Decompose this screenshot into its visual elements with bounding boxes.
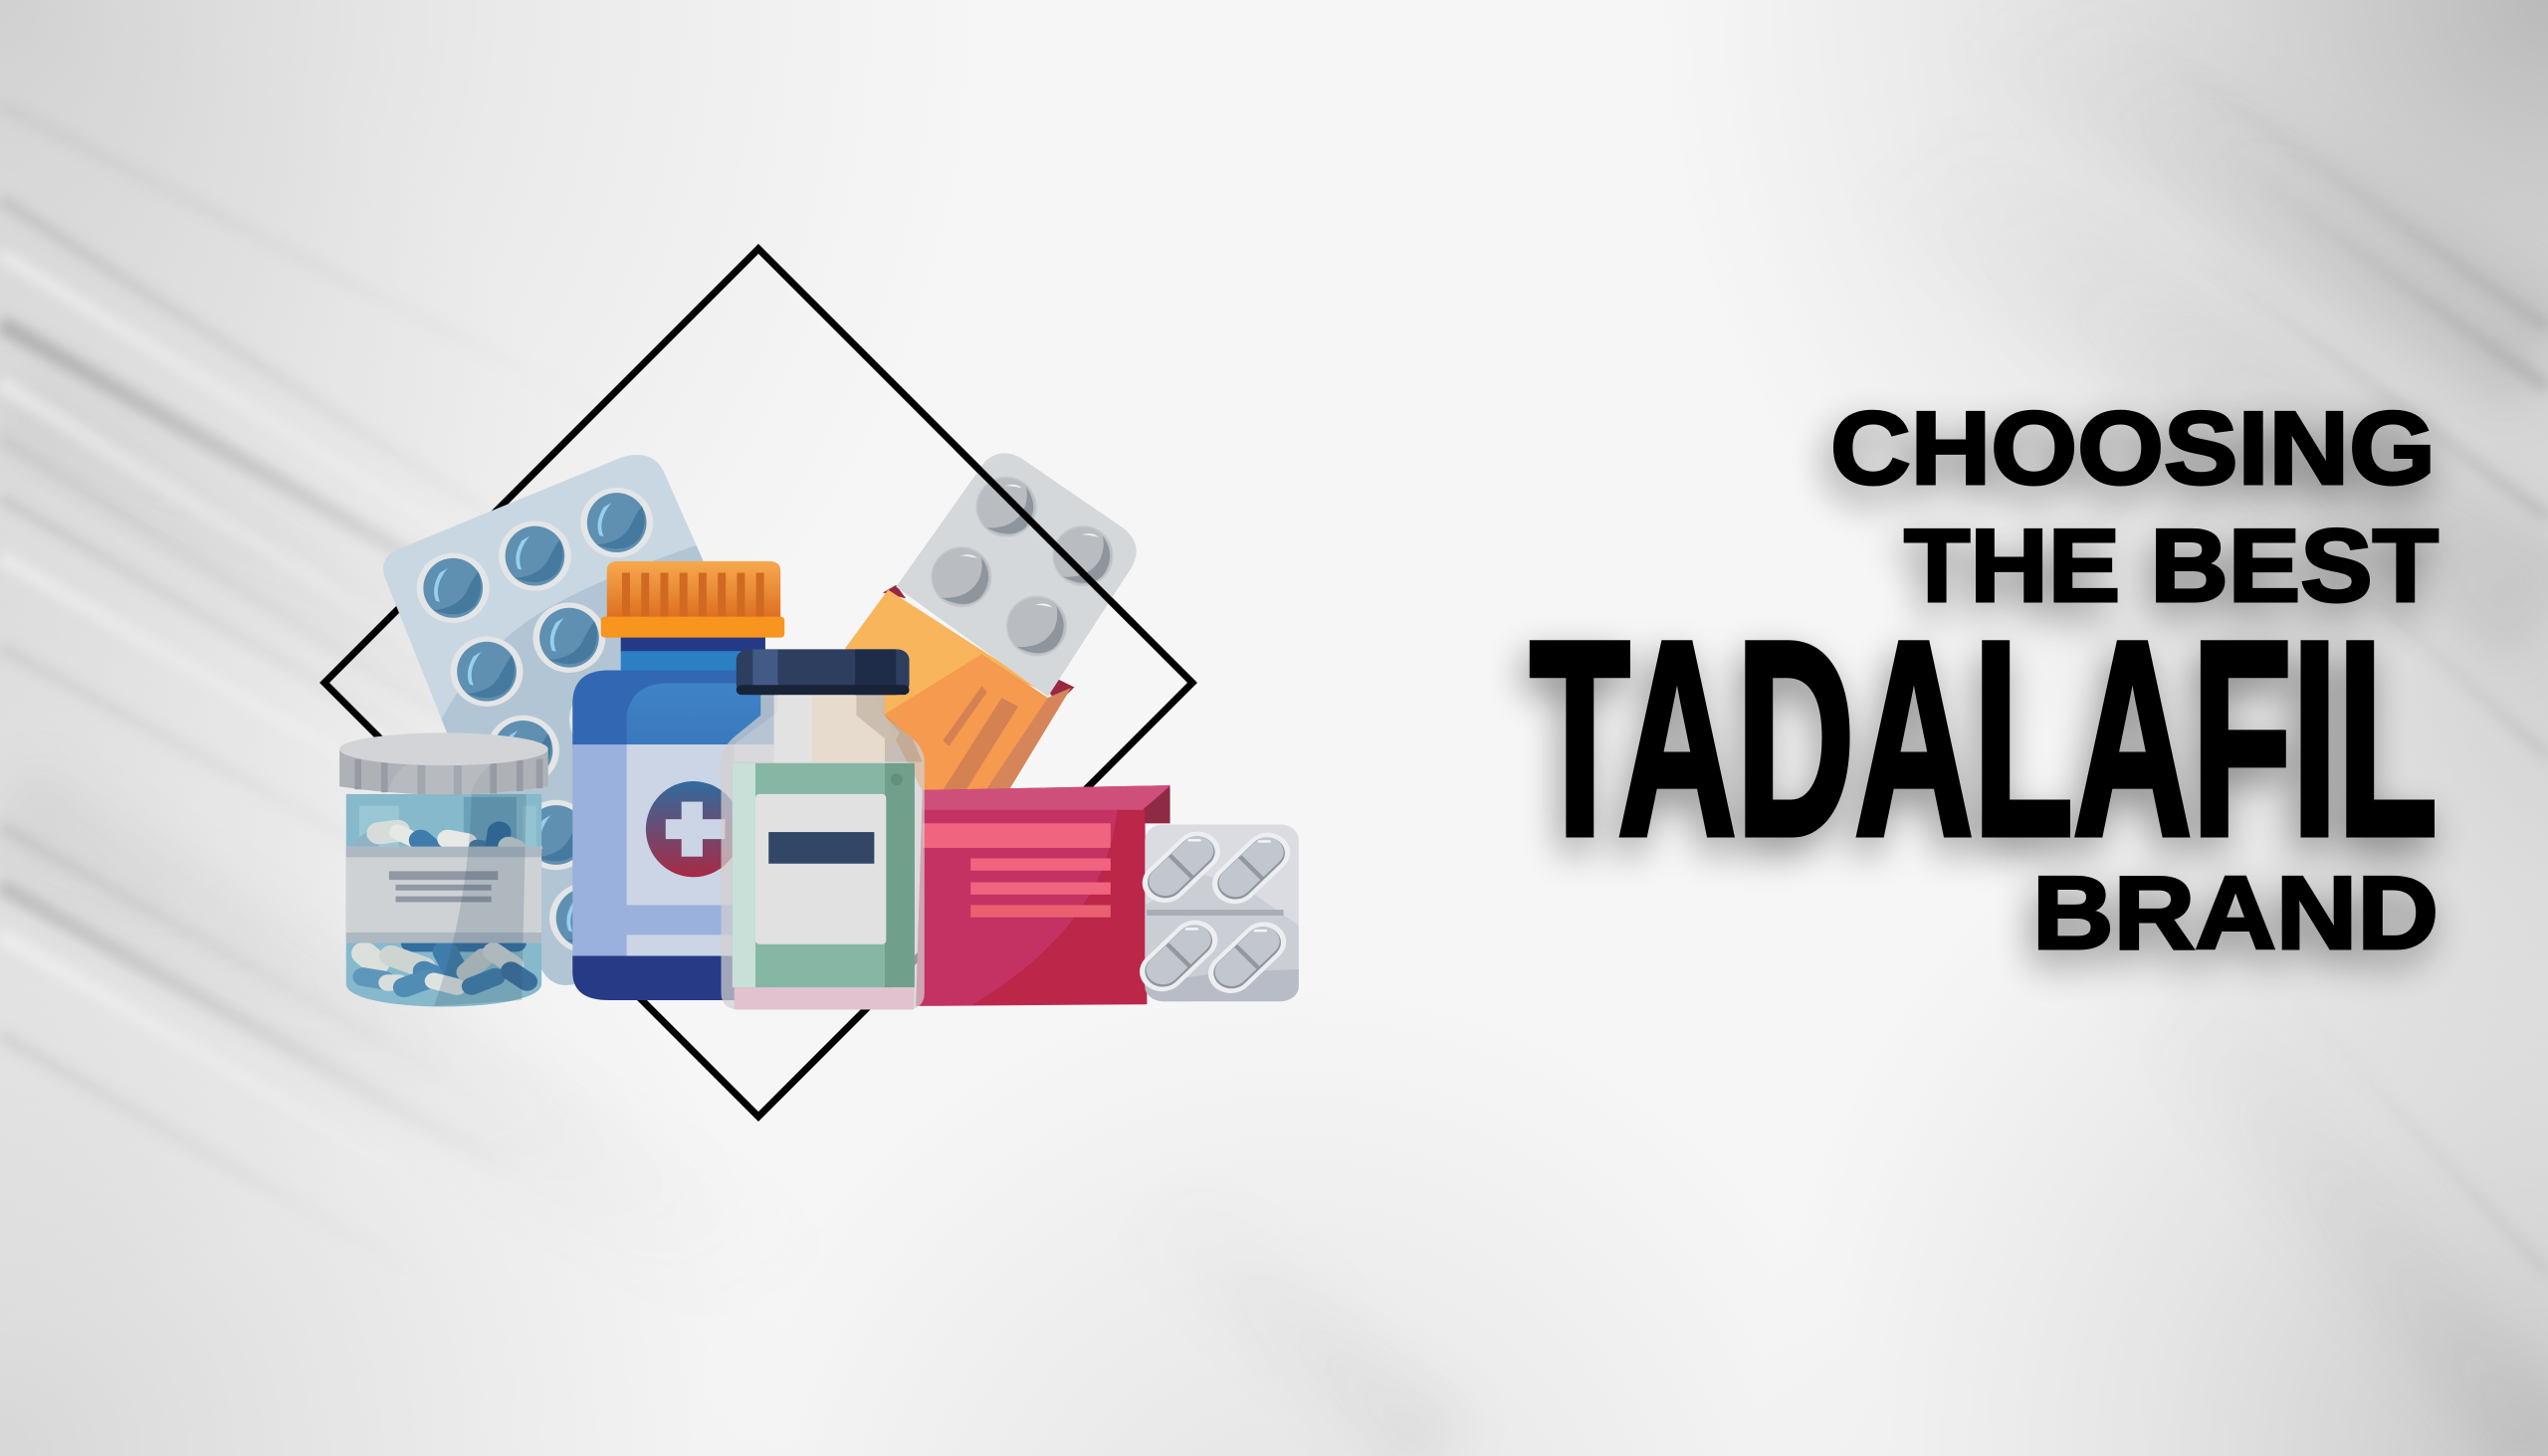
heading: brand: BRAND: [2032, 856, 2439, 971]
heading: choosing: CHOOSING: [1830, 391, 2436, 507]
capsule blister pack: [1145, 824, 1299, 1001]
title shadow: BRAND: [2027, 871, 2434, 986]
title shadow: THE BEST: [1899, 523, 2434, 639]
title block: [1525, 391, 2439, 986]
blue blister pack: [383, 455, 704, 985]
heading: the best: THE BEST: [1904, 509, 2439, 624]
liquid: [733, 763, 915, 987]
diamond edge showing over grey blister: [957, 448, 1135, 625]
orange medicine envelope: [845, 585, 1074, 791]
jar label: [346, 847, 541, 943]
capsule jar with grey lid: [339, 732, 548, 1006]
jar lid: [339, 732, 548, 795]
title shadow: [1525, 406, 2434, 986]
cross emblem: [646, 781, 741, 877]
vial label: [755, 794, 886, 944]
grey blister pack: [896, 453, 1137, 697]
blue bottle with orange cap: [572, 561, 784, 1000]
diamond outline: [324, 249, 1192, 1117]
pink medicine box: [916, 785, 1170, 1006]
orange cap: [601, 561, 784, 638]
glass vial with green label: [721, 649, 925, 1009]
capsules inside jar: [363, 831, 527, 987]
title shadow: CHOOSING: [1825, 406, 2431, 521]
jar reflection: [434, 794, 527, 1006]
medicine illustration: [339, 448, 1299, 1009]
vial cap: [737, 649, 910, 695]
